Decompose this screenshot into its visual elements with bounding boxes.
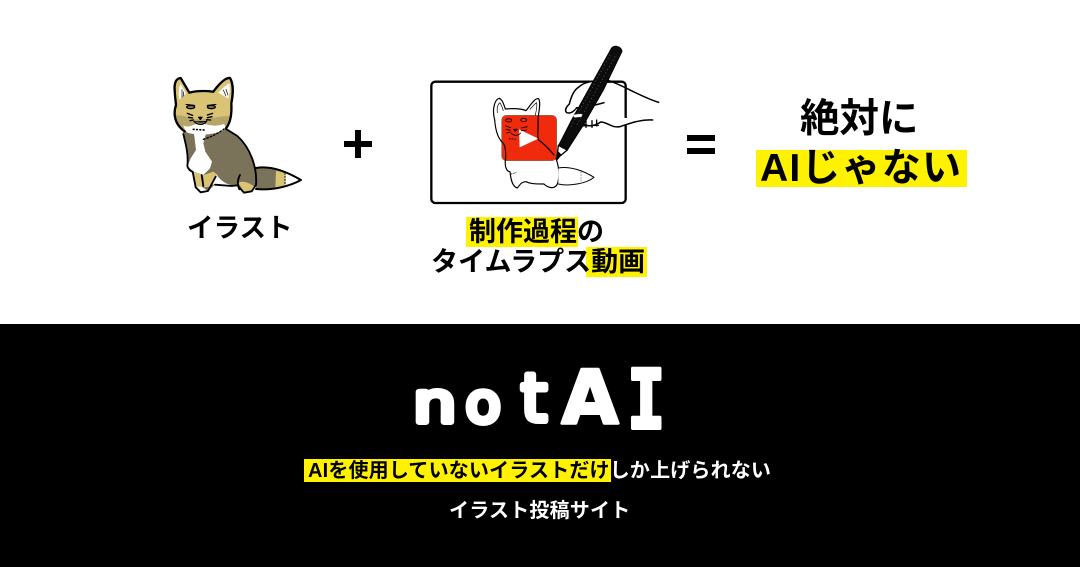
label: timelapse video of the making process (431, 217, 647, 277)
highlight: tagline (304, 459, 611, 482)
heading: absolutely: 絶対に (800, 97, 918, 141)
subtitle: illustration posting site: イラスト投稿サイト (449, 500, 630, 522)
highlight: video (586, 247, 647, 277)
black footer band (0, 324, 1080, 567)
logo: notAI: o (466, 371, 501, 435)
tagline: AIを使用していないイラストだけしか上げられない (308, 460, 771, 482)
text line 1: 制作過程の (469, 217, 604, 247)
logo: notAI: n (413, 371, 456, 435)
highlight: not AI (756, 150, 967, 187)
logo: notAI: I (627, 354, 665, 448)
text line 2: タイムラプス動画 (431, 247, 645, 277)
label: illustration: イラスト (187, 213, 292, 243)
equals sign (687, 135, 715, 154)
highlight: making process (466, 217, 578, 247)
plus sign (344, 130, 372, 158)
heading: not AI: AIじゃない (760, 147, 962, 190)
logo: notAI: t (521, 360, 547, 437)
logo: notAI: A (562, 356, 618, 442)
